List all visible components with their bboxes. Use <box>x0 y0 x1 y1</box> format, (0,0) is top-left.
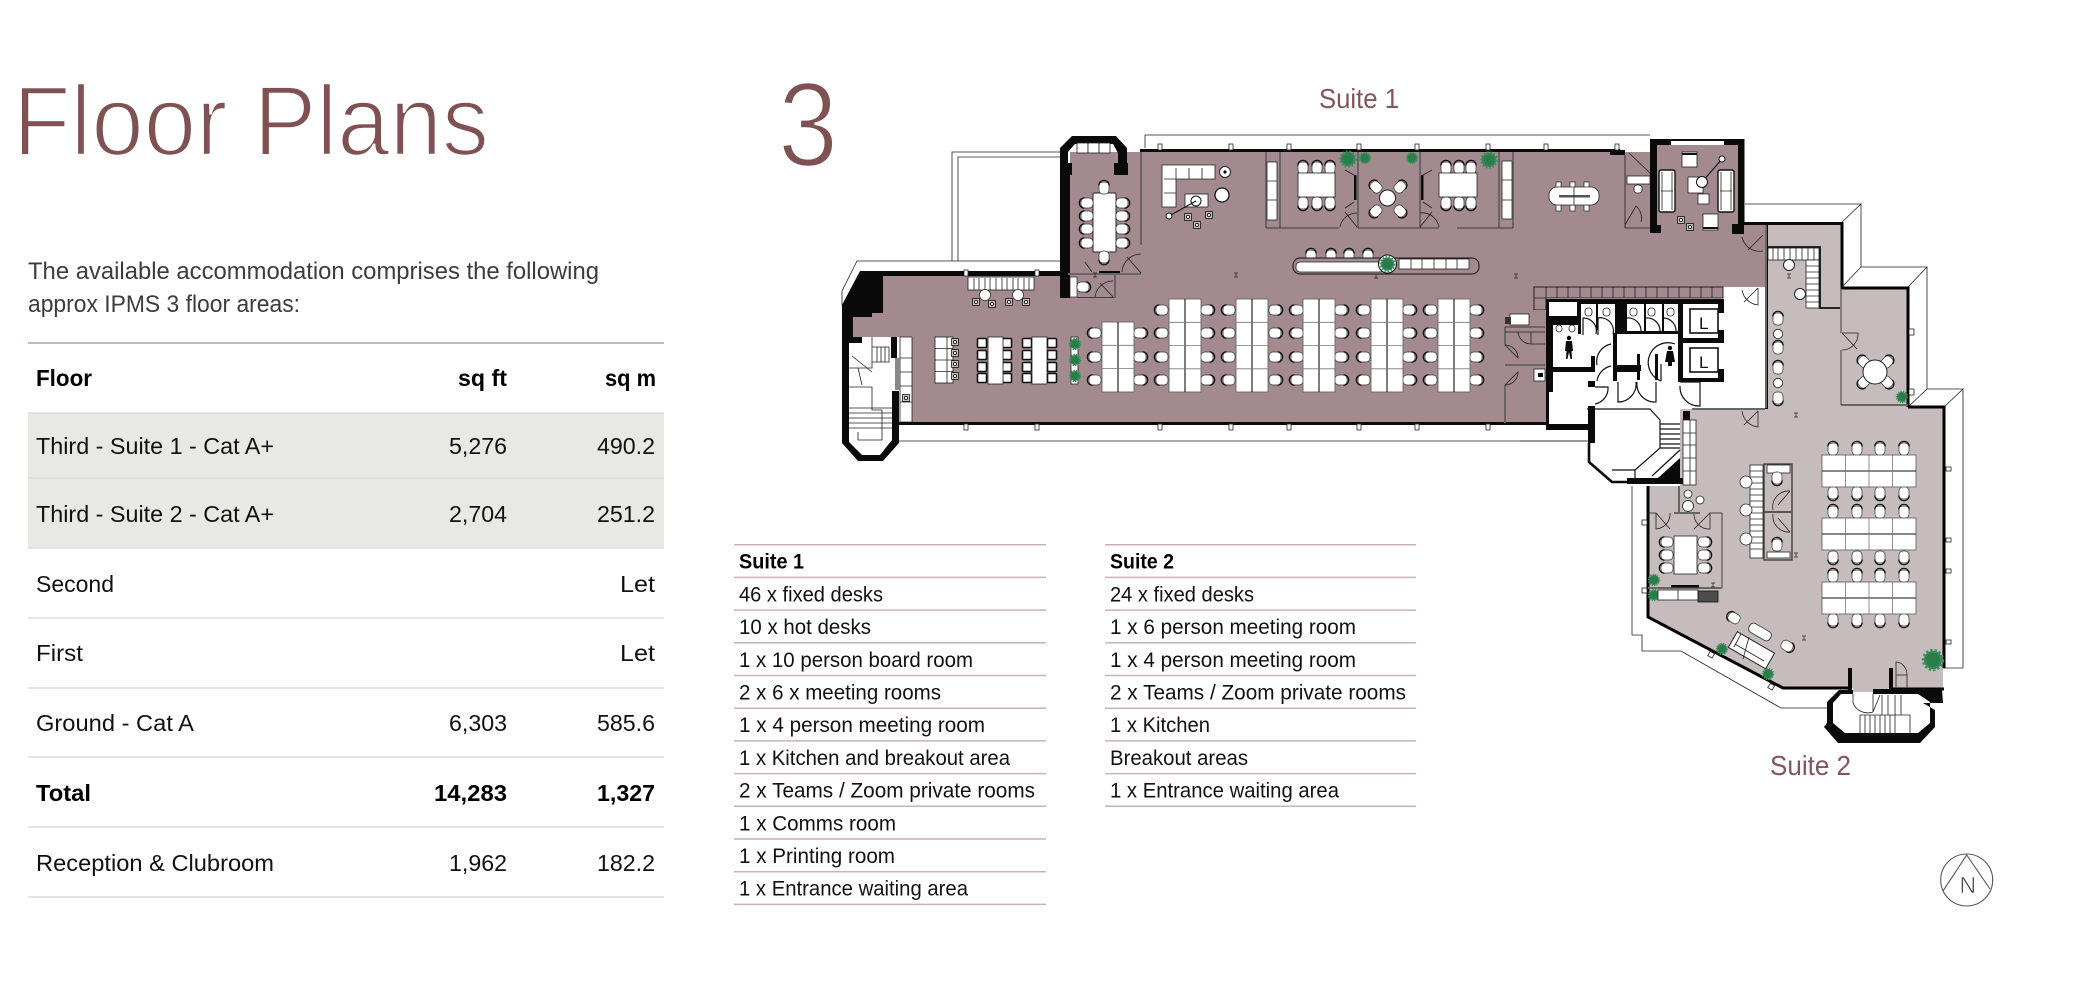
core corridor doors <box>1742 288 1758 427</box>
suite 2 list: 1 x Entrance waiting area <box>1110 780 1339 803</box>
row: ground: 585.6 <box>597 710 655 736</box>
bench desk <box>935 337 958 383</box>
suite 2 lounge <box>1717 610 1942 688</box>
header row: sq m <box>605 365 656 391</box>
row: third suite 1 <box>36 433 655 459</box>
suite 2 walls <box>1648 222 1944 743</box>
window recess <box>1077 143 1110 153</box>
core kitchen units <box>1683 420 1696 485</box>
header row: Floor <box>36 365 92 391</box>
suite 1 list: 1 x Entrance waiting area <box>739 878 968 901</box>
kitchen bar <box>1293 248 1479 274</box>
suite 2 floor area <box>1647 225 1943 692</box>
suite 2 list: 2 x Teams / Zoom private rooms <box>1110 682 1406 704</box>
suite 1 list: 46 x fixed desks <box>739 583 883 606</box>
core walls <box>1546 299 1724 484</box>
row: third suite 2 <box>36 501 655 527</box>
lounge seating <box>1162 165 1230 228</box>
row: ground: 6,303 <box>449 710 507 736</box>
west staircase <box>849 337 912 440</box>
intro text <box>28 258 599 318</box>
row: third suite 2: 2,704 <box>449 501 507 527</box>
header row <box>36 365 656 391</box>
suite 1 list: 1 x Comms room <box>739 812 896 835</box>
compass: N <box>1960 872 1976 898</box>
row: total: 14,283 <box>434 780 507 806</box>
icon: gents figure <box>1565 336 1573 359</box>
lift l1 <box>1690 309 1718 333</box>
compass <box>1941 854 1993 906</box>
suite 1 list: 1 x 10 person board room <box>739 649 973 672</box>
header row: sq ft <box>458 365 507 391</box>
structural walls <box>842 136 1744 461</box>
suite 1 east door <box>1742 235 1763 251</box>
row: ground: Ground - Cat A <box>36 710 195 736</box>
row: ground <box>36 710 655 736</box>
north east alcove and stair rail <box>1767 247 1840 308</box>
markers <box>1093 273 1806 640</box>
meeting rooms and storage <box>1266 152 1513 228</box>
suite 1 list: Suite 1 <box>739 551 804 574</box>
suite 1 list: 1 x Printing room <box>739 845 895 868</box>
suite 2 list: 24 x fixed desks <box>1110 583 1254 606</box>
small wc and door north east <box>1625 153 1650 228</box>
lift l2 <box>1690 348 1718 372</box>
suite 2 posts <box>1642 329 1951 690</box>
suite 2 list: Breakout areas <box>1110 747 1248 770</box>
row: third suite 2: Third - Suite 2 - Cat A+ <box>36 501 274 527</box>
comms room <box>1070 275 1116 298</box>
suite 1 list: 2 x 6 x meeting rooms <box>739 682 941 704</box>
row: reception <box>36 850 655 876</box>
suite 1 floor area <box>853 141 1766 423</box>
planter <box>1070 337 1080 384</box>
row: second <box>36 571 656 597</box>
service core <box>1534 287 1758 485</box>
suite 1 list: 1 x 4 person meeting room <box>739 714 985 737</box>
row: reception: Reception & Clubroom <box>36 850 274 876</box>
toilets <box>1556 308 1676 335</box>
intro text: The available accommodation comprises the following <box>28 258 599 285</box>
row: total: Total <box>36 780 91 806</box>
area table <box>28 343 664 897</box>
suite 1 list <box>734 545 1046 904</box>
row: second: Second <box>36 571 114 597</box>
row: first: Let <box>620 640 656 666</box>
suite 1 list: 1 x Kitchen and breakout area <box>739 747 1010 770</box>
row: second: Let <box>620 571 656 597</box>
row: first <box>36 640 656 666</box>
floor number: 3 <box>778 58 838 192</box>
title: Floor Plans <box>13 65 489 176</box>
row: reception: 1,962 <box>449 850 507 876</box>
row: reception: 182.2 <box>597 850 655 876</box>
pill table <box>1549 182 1599 211</box>
icon: ladies figure <box>1665 346 1675 366</box>
third floor highlight <box>28 413 664 548</box>
east lounge <box>1659 152 1734 230</box>
suite 2 stair tower <box>1853 694 1910 735</box>
core storage row <box>1534 287 1723 310</box>
row: total: 1,327 <box>597 780 655 806</box>
suite 2 list: Suite 2 <box>1110 551 1174 574</box>
label: suite 1: Suite 1 <box>1319 83 1399 114</box>
suite 2 list: 1 x 4 person meeting room <box>1110 649 1356 672</box>
board room <box>1068 152 1141 274</box>
suite 1 list: 2 x Teams / Zoom private rooms <box>739 780 1035 803</box>
suite 1 desks <box>1087 299 1484 392</box>
intro text: approx IPMS 3 floor areas: <box>28 291 300 318</box>
row: total <box>36 780 655 806</box>
suite 2 kitchen corner tables <box>1679 486 1704 513</box>
wall posts <box>964 144 1619 430</box>
label: suite 2: Suite 2 <box>1770 750 1851 781</box>
floor plan <box>842 135 1963 743</box>
row: third suite 1: 5,276 <box>449 433 507 459</box>
suite 2 meeting room <box>1647 513 1722 602</box>
core doors and lobby <box>1587 343 1700 480</box>
suite 2 list <box>1105 545 1416 806</box>
lift l1: L <box>1699 314 1708 333</box>
waiting seats <box>1773 311 1783 406</box>
window bench <box>968 277 1034 307</box>
row: third suite 1: 490.2 <box>597 433 655 459</box>
east room window <box>1671 141 1724 145</box>
dining tables <box>978 337 1056 384</box>
suite 2 list: 1 x 6 person meeting room <box>1110 616 1356 639</box>
breakout room <box>1841 287 1908 405</box>
balcony outlines <box>842 135 1963 708</box>
row: third suite 1: Third - Suite 1 - Cat A+ <box>36 433 274 459</box>
suite 2 desks <box>1822 441 1916 628</box>
lift l2: L <box>1699 353 1708 372</box>
row: third suite 2: 251.2 <box>597 501 655 527</box>
row: first: First <box>36 640 84 666</box>
core white box <box>1549 302 1577 316</box>
suite 2 list: 1 x Kitchen <box>1110 714 1210 737</box>
suite 1 list: 10 x hot desks <box>739 616 871 639</box>
south west lobby <box>1505 314 1545 423</box>
central pods <box>1740 464 1792 560</box>
lobby outer wall <box>1589 443 1628 482</box>
